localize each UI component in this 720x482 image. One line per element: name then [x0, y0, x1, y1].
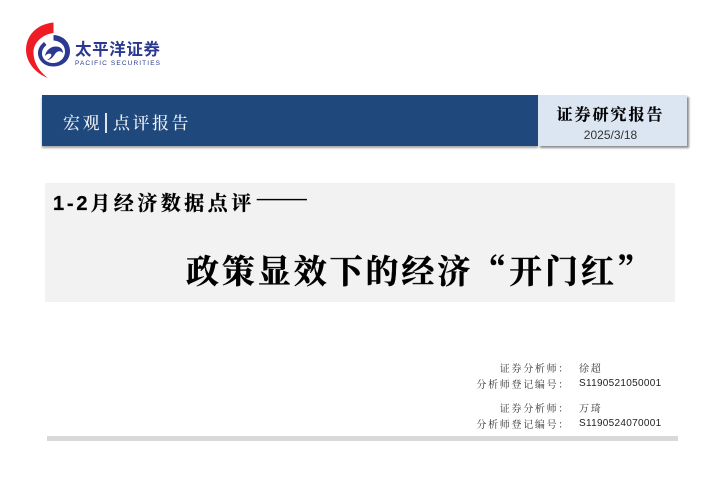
footer gray bar — [47, 436, 678, 441]
text: analyst 2 registration label: 分析师登记编号： — [476, 416, 570, 431]
text: analyst 2 registration number: S1190524070001 — [579, 418, 661, 429]
text: date: 2025/3/18 — [584, 128, 637, 142]
text: analyst 1 registration number: S1190521050001 — [579, 378, 661, 389]
header banner — [40, 95, 690, 150]
analyst block — [476, 360, 661, 431]
text: report type: 宏观 点评报告 — [63, 109, 191, 134]
logo wordmark English: PACIFIC SECURITIES — [75, 60, 161, 67]
logo wordmark Chinese: 太平洋证券 — [75, 36, 160, 60]
panel: report label — [538, 95, 687, 146]
heading: main title: 政策显效下的经济“开门红” — [186, 246, 653, 293]
icon: blue swirl ring — [38, 35, 70, 66]
panel: title block — [45, 183, 675, 302]
heading: subtitle: 1-2月经济数据点评—— — [53, 179, 309, 218]
text: securities research report: 证券研究报告 — [556, 102, 664, 125]
panel: blue report type band — [42, 95, 538, 146]
icon: red crescent — [26, 22, 54, 78]
logo: Pacific Securities — [26, 22, 161, 78]
text: analyst 2 name: 万琦 — [579, 400, 602, 415]
text: analyst 1 name: 徐超 — [579, 360, 602, 375]
text: analyst 1 registration label: 分析师登记编号： — [476, 376, 570, 391]
text: analyst 2 label: 证券分析师： — [500, 400, 570, 415]
text: analyst 1 label: 证券分析师： — [500, 360, 570, 375]
